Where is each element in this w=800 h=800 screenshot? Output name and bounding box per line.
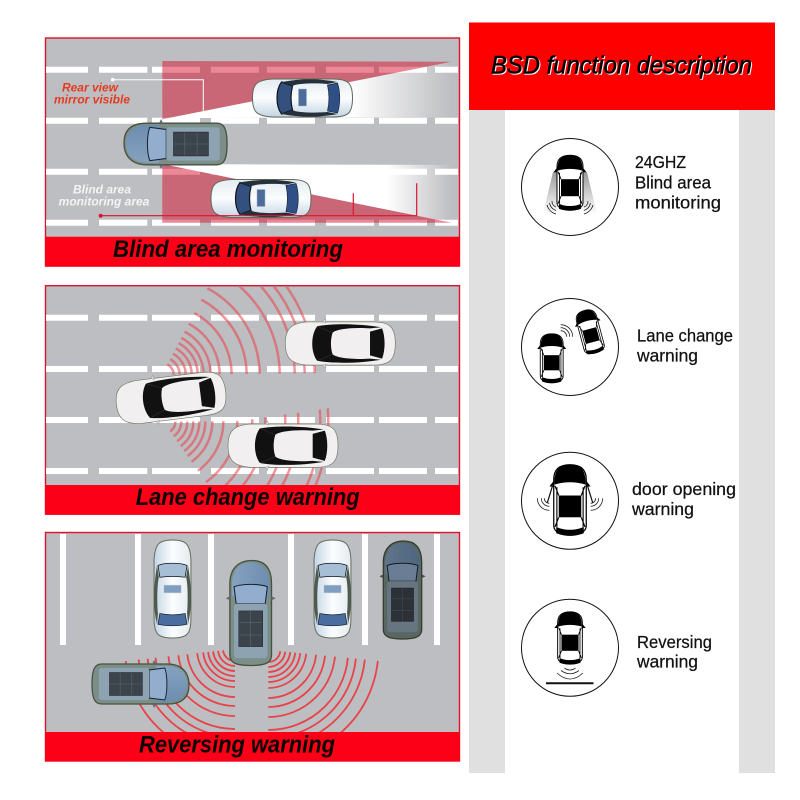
pointer dot: red — [99, 214, 103, 218]
title: lane change warning: Lane change warning — [136, 484, 360, 511]
header bar — [469, 22, 775, 110]
text: door opening warning: door opening — [632, 479, 736, 499]
text: reversing warning: Reversing — [637, 632, 712, 652]
text: lane change warning: warning — [636, 346, 698, 366]
upper visible beam — [162, 62, 452, 119]
car: silver lower — [211, 180, 311, 218]
panel: BSD function description — [469, 22, 775, 773]
text: door opening warning: warning — [631, 499, 694, 519]
label: rear view mirror visible: mirror visible — [54, 92, 130, 106]
text: 24GHZ blind area monitoring: 24GHZ — [635, 152, 686, 172]
car: white upper — [285, 319, 395, 368]
icon: reversing warning — [522, 599, 618, 696]
rear view pointer line — [113, 80, 203, 112]
icon: lane change warning — [522, 298, 618, 396]
upper blind zone wedge — [162, 61, 452, 119]
radar waves: right — [268, 651, 379, 732]
radar waves: left — [124, 650, 235, 732]
car: white lower — [228, 421, 338, 471]
car: silver parked left — [154, 540, 191, 638]
title bar — [45, 237, 460, 267]
car: white changing lane — [113, 367, 229, 429]
heading: BSD function description — [491, 52, 752, 80]
car: silver parked right — [314, 540, 351, 638]
car: SUV reversing centre — [226, 560, 276, 666]
radar waves: upper — [166, 287, 316, 375]
pointer dot: white — [111, 78, 114, 81]
title bar — [45, 732, 460, 762]
text: 24GHZ blind area monitoring: monitoring — [635, 192, 721, 212]
icon: blind area monitoring — [522, 138, 618, 236]
text: 24GHZ blind area monitoring: Blind area — [635, 172, 711, 192]
radar waves: lower — [170, 408, 330, 485]
car: SUV reversing left — [92, 660, 189, 708]
icon: door opening warning — [522, 452, 618, 549]
lower visible beam — [162, 164, 452, 223]
panel: reversing warning — [45, 532, 460, 762]
panel: blind area monitoring — [45, 38, 460, 267]
panel: lane change warning — [44, 285, 460, 515]
car: dark SUV parked — [379, 541, 426, 639]
label: blind area monitoring area: monitoring area — [59, 194, 150, 208]
label: blind area monitoring area: Blind area — [73, 182, 131, 196]
title: reversing warning: Reversing warning — [139, 732, 335, 758]
title: blind area monitoring: Blind area monitoring — [113, 236, 343, 263]
text: reversing warning: warning — [636, 652, 698, 672]
car: silver upper — [252, 79, 352, 117]
blind area pointer line — [101, 183, 417, 216]
label: rear view mirror visible: Rear view — [62, 80, 119, 94]
lower blind zone wedge — [162, 164, 452, 223]
car: SUV — [124, 119, 227, 169]
text: lane change warning: Lane change — [637, 326, 733, 346]
title bar — [45, 485, 460, 515]
